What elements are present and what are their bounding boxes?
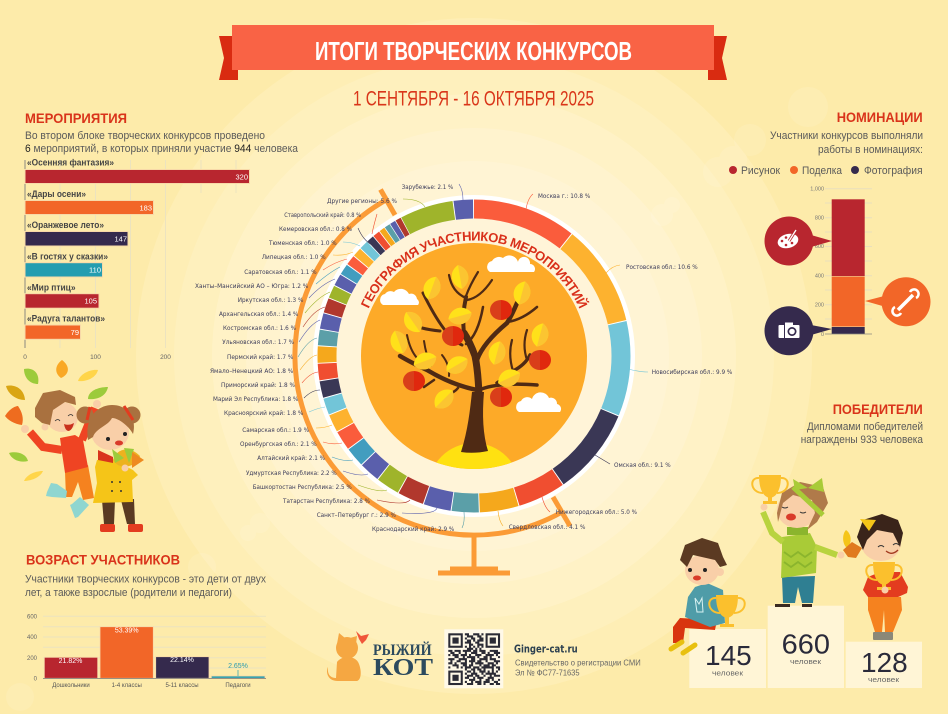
bar chart: age: 600	[27, 614, 38, 620]
stacked bar chart: nominations: 400	[815, 274, 824, 280]
bar chart: events: «Мир птиц»	[27, 283, 76, 293]
curved heading: geography: ГЕОГРАФИЯ УЧАСТНИКОВ МЕРОПРИЯТИЙ	[360, 232, 590, 308]
tree leaves	[387, 264, 551, 413]
site information: Эл № ФС77-71635	[515, 668, 580, 678]
region labels: Ямало–Ненецкий АО: 1.8 %	[210, 368, 294, 375]
region labels: Ставропольский край: 0.8 %	[284, 212, 361, 219]
bar chart: events: «Дары осени»	[27, 189, 86, 199]
legend	[729, 165, 923, 177]
winners description: Дипломами победителей	[807, 421, 923, 433]
nominations description: Участники конкурсов выполняли	[770, 130, 923, 142]
bar chart: age: 200	[27, 656, 38, 662]
podium: человек	[868, 675, 900, 684]
stacked bar chart: nominations: 1,000	[810, 186, 824, 192]
bar chart: age: Дошкольники	[52, 683, 90, 689]
girl with leaves	[76, 405, 144, 532]
bar chart: events: 147	[114, 234, 127, 244]
bar chart: events: 183	[139, 204, 152, 212]
nominations description: работы в номинациях:	[818, 144, 923, 156]
heading: events: МЕРОПРИЯТИЯ	[25, 110, 127, 126]
stacked bar chart: nominations: 200	[815, 302, 824, 308]
region labels: Ростовская обл.: 10.6 %	[626, 264, 698, 271]
logo: ginger cat	[327, 631, 433, 681]
bar chart: age: 21.82%	[59, 658, 82, 665]
region labels: Омская обл.: 9.1 %	[614, 462, 671, 469]
podium numbers: 660	[782, 628, 830, 659]
bar chart: age: 5-11 классы	[165, 683, 199, 689]
events description: Во втором блоке творческих конкурсов проведено	[25, 130, 265, 142]
clouds	[380, 255, 561, 412]
bar chart: events: 105	[84, 297, 97, 306]
site information	[514, 642, 641, 678]
region labels: Башкортостан Республика: 2.5 %	[253, 484, 352, 491]
bar chart: events: «Оранжевое лето»	[27, 220, 104, 230]
podium: человек	[712, 669, 744, 678]
panel: age of participants	[25, 551, 266, 689]
panel: nominations	[729, 109, 930, 355]
region labels: Нижегородская обл.: 5.0 %	[556, 509, 637, 516]
bar chart: events: 320	[235, 172, 248, 182]
region labels: Ульяновская обл.: 1.7 %	[222, 339, 294, 346]
callout: drawing	[764, 216, 832, 266]
bar chart: age: Педагоги	[225, 683, 251, 689]
callout: craft	[865, 277, 930, 326]
boy jumping	[21, 390, 101, 518]
bar chart: age: 22.14%	[170, 657, 194, 664]
title banner	[219, 25, 727, 80]
bar chart: age: 0	[34, 676, 38, 682]
date subtitle: 1 СЕНТЯБРЯ - 16 ОКТЯБРЯ 2025	[353, 88, 594, 110]
region labels: Алтайский край: 2.1 %	[257, 455, 325, 462]
stacked bar chart: nominations	[810, 186, 872, 338]
region labels: Татарстан Республика: 2.8 %	[282, 498, 370, 505]
bar chart: age: 400	[27, 635, 38, 641]
region labels: Тюменская обл.: 1.0 %	[268, 240, 337, 247]
podium numbers: 128	[861, 647, 908, 678]
bar chart: events: «Осенняя фантазия»	[27, 158, 114, 168]
icon: camera	[778, 322, 800, 338]
stacked bar chart: nominations: 800	[815, 216, 824, 222]
donut chart: regions	[316, 198, 632, 514]
region labels: Удмуртская Республика: 2.2 %	[246, 470, 337, 477]
tree branches	[400, 272, 537, 453]
falling leaves	[5, 360, 108, 481]
leaves in hand	[843, 530, 862, 558]
bar chart: age: 1-4 классы	[112, 683, 142, 689]
winners description: награждены 933 человека	[801, 434, 924, 446]
region labels: Приморский край: 1.8 %	[221, 382, 295, 389]
region labels: Новосибирская обл.: 9.9 %	[652, 369, 733, 376]
QR code	[444, 629, 503, 688]
region labels: Липецкая обл.: 1.0 %	[262, 254, 326, 261]
legend: Фотография	[864, 165, 923, 177]
region labels: Красноярский край: 1.8 %	[224, 410, 304, 417]
region labels: Марий Эл Республика: 1.8 %	[213, 396, 299, 403]
site information: Ginger-cat.ru	[514, 642, 578, 655]
illustration: girl with gold cup	[752, 475, 862, 607]
stacked bar chart: nominations: 600	[815, 244, 824, 250]
region labels: Зарубежье: 2.1 %	[402, 184, 454, 191]
bar chart: events	[23, 158, 250, 361]
region labels: Костромская обл.: 1.6 %	[223, 325, 296, 332]
heading: nominations: НОМИНАЦИИ	[837, 109, 923, 125]
region labels: Кемеровская обл.: 0.8 %	[279, 226, 352, 233]
logo wordmark	[373, 640, 433, 681]
icon: trophy 2	[709, 595, 745, 627]
illustration: boy with silver cup	[671, 538, 745, 653]
region labels: Свердловская обл.: 4.1 %	[509, 524, 586, 531]
region labels: Иркутская обл.: 1.3 %	[238, 297, 304, 304]
site information: Свидетельство о регистрации СМИ	[515, 658, 641, 668]
bar chart: age	[27, 614, 266, 689]
logo wordmark: РЫЖИЙ	[373, 640, 432, 659]
apples	[403, 300, 551, 407]
events description	[25, 130, 299, 155]
age description	[25, 574, 266, 599]
icon: wrench	[892, 289, 919, 316]
bar chart: events: 0	[23, 354, 27, 361]
bar chart: events: 110	[89, 266, 101, 275]
illustration: boy with bronze cup	[857, 514, 908, 640]
bar chart: events: 200	[160, 354, 171, 361]
heading: age: ВОЗРАСТ УЧАСТНИКОВ	[26, 551, 180, 567]
winners description	[801, 421, 924, 446]
region labels: Ханты–Мансийский АО – Югра: 1.2 %	[195, 283, 309, 290]
panel: winners	[671, 401, 924, 688]
illustration: jumping children with leaves	[5, 360, 144, 532]
panel: events	[23, 110, 299, 361]
icon: cat	[327, 631, 369, 681]
icon: trophy 3	[866, 562, 902, 590]
region labels: Краснодарский край: 2.9 %	[372, 526, 455, 533]
icon: palette	[776, 230, 800, 250]
icon: trophy 1	[752, 475, 788, 504]
age description: Участники творческих конкурсов - это дети от двух	[25, 574, 266, 586]
events description: 6 мероприятий, в которых приняли участие 944 человека	[25, 143, 299, 155]
bar chart: age: 53.39%	[115, 627, 139, 634]
region labels: Самарская обл.: 1.9 %	[242, 427, 309, 434]
region labels: Пермский край: 1.7 %	[227, 354, 294, 361]
bar chart: age: 2.65%	[228, 663, 248, 670]
podium	[689, 606, 922, 688]
logo wordmark: КОТ	[373, 655, 433, 681]
podium numbers: 145	[705, 640, 752, 671]
age description: лет, а также взрослые (родители и педагоги)	[25, 587, 232, 599]
bar chart: events: 100	[90, 354, 101, 361]
leader lines	[298, 184, 648, 528]
region labels: Другие регионы: 5.6 %	[327, 198, 397, 205]
region labels	[195, 184, 733, 533]
illustration: apple tree	[361, 243, 587, 469]
heading: winners: ПОБЕДИТЕЛИ	[833, 401, 923, 417]
bar chart: events: 79	[71, 328, 79, 337]
title banner: ИТОГИ ТВОРЧЕСКИХ КОНКУРСОВ	[315, 36, 632, 66]
hill	[436, 444, 512, 469]
globe: arc and stand	[295, 190, 570, 573]
nominations description	[770, 130, 923, 156]
legend: Поделка	[802, 165, 843, 177]
legend: Рисунок	[741, 165, 780, 177]
region labels: Саратовская обл.: 1.1 %	[244, 269, 317, 276]
podium: человек	[790, 657, 822, 666]
region labels: Оренбургская обл.: 2.1 %	[240, 441, 317, 448]
region labels: Архангельская обл.: 1.4 %	[219, 311, 299, 318]
stacked bar chart: nominations: 0	[821, 332, 824, 338]
region labels: Санкт–Петербург г.: 2.9 %	[317, 512, 396, 519]
region labels: Москва г.: 10.8 %	[538, 193, 591, 200]
podium numbers	[705, 628, 908, 678]
bar chart: events: «В гостях у сказки»	[27, 251, 108, 261]
callout: photo	[764, 306, 832, 355]
bar chart: events: «Радуга талантов»	[27, 314, 105, 324]
